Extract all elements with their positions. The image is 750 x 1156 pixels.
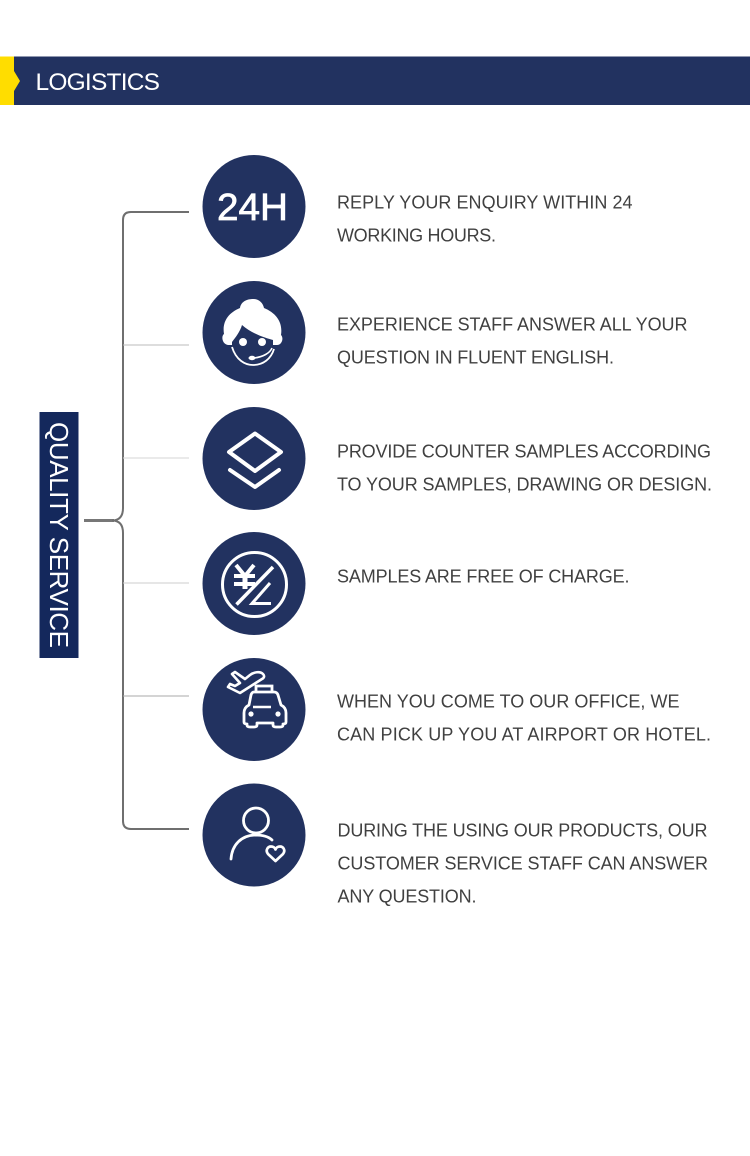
text: counter samples: TO YOUR SAMPLES, DRAWING OR DESIGN. bbox=[337, 474, 712, 494]
header banner bbox=[0, 56, 750, 105]
icon: stacked layers bbox=[202, 407, 306, 510]
text: staff: EXPERIENCE STAFF ANSWER ALL YOUR bbox=[337, 314, 688, 334]
connector bracket bbox=[84, 212, 189, 829]
text: customer service: DURING THE USING OUR PRODUCTS, OUR bbox=[338, 820, 708, 840]
icon: no charge bbox=[202, 532, 306, 635]
row 2: staff bbox=[202, 281, 688, 384]
text: pickup: WHEN YOU COME TO OUR OFFICE, WE bbox=[337, 692, 680, 712]
text: counter samples: PROVIDE COUNTER SAMPLES ACCORDING bbox=[337, 442, 711, 462]
text: customer service: CUSTOMER SERVICE STAFF CAN ANSWER bbox=[338, 854, 708, 874]
text: reply: WORKING HOURS. bbox=[337, 226, 496, 246]
row 3: counter samples bbox=[202, 407, 712, 510]
text: pickup bbox=[337, 692, 711, 744]
text: staff bbox=[337, 314, 688, 368]
row 4: free samples bbox=[202, 532, 630, 635]
text: pickup: CAN PICK UP YOU AT AIRPORT OR HOTEL. bbox=[337, 724, 711, 744]
text: reply bbox=[337, 192, 632, 246]
text: free samples: SAMPLES ARE FREE OF CHARGE. bbox=[337, 566, 630, 586]
icon: 24H bbox=[202, 155, 306, 258]
row 5: pickup bbox=[202, 658, 711, 761]
text: customer service bbox=[338, 820, 708, 906]
text: staff: QUESTION IN FLUENT ENGLISH. bbox=[337, 348, 614, 368]
heading: logistics: LOGISTICS bbox=[36, 69, 160, 96]
row 1: reply time bbox=[202, 155, 632, 258]
icon: support agent with headset bbox=[202, 281, 306, 384]
side label: quality service: QUALITY SERVICE bbox=[44, 422, 74, 648]
text: customer service: ANY QUESTION. bbox=[338, 886, 476, 906]
icon: plane and taxi bbox=[202, 658, 306, 761]
text: counter samples bbox=[337, 442, 712, 494]
icon: person with heart bbox=[202, 784, 306, 886]
row 6: customer service bbox=[202, 784, 708, 906]
text: reply: REPLY YOUR ENQUIRY WITHIN 24 bbox=[337, 192, 632, 212]
icon: 24H: 24H bbox=[217, 187, 288, 229]
